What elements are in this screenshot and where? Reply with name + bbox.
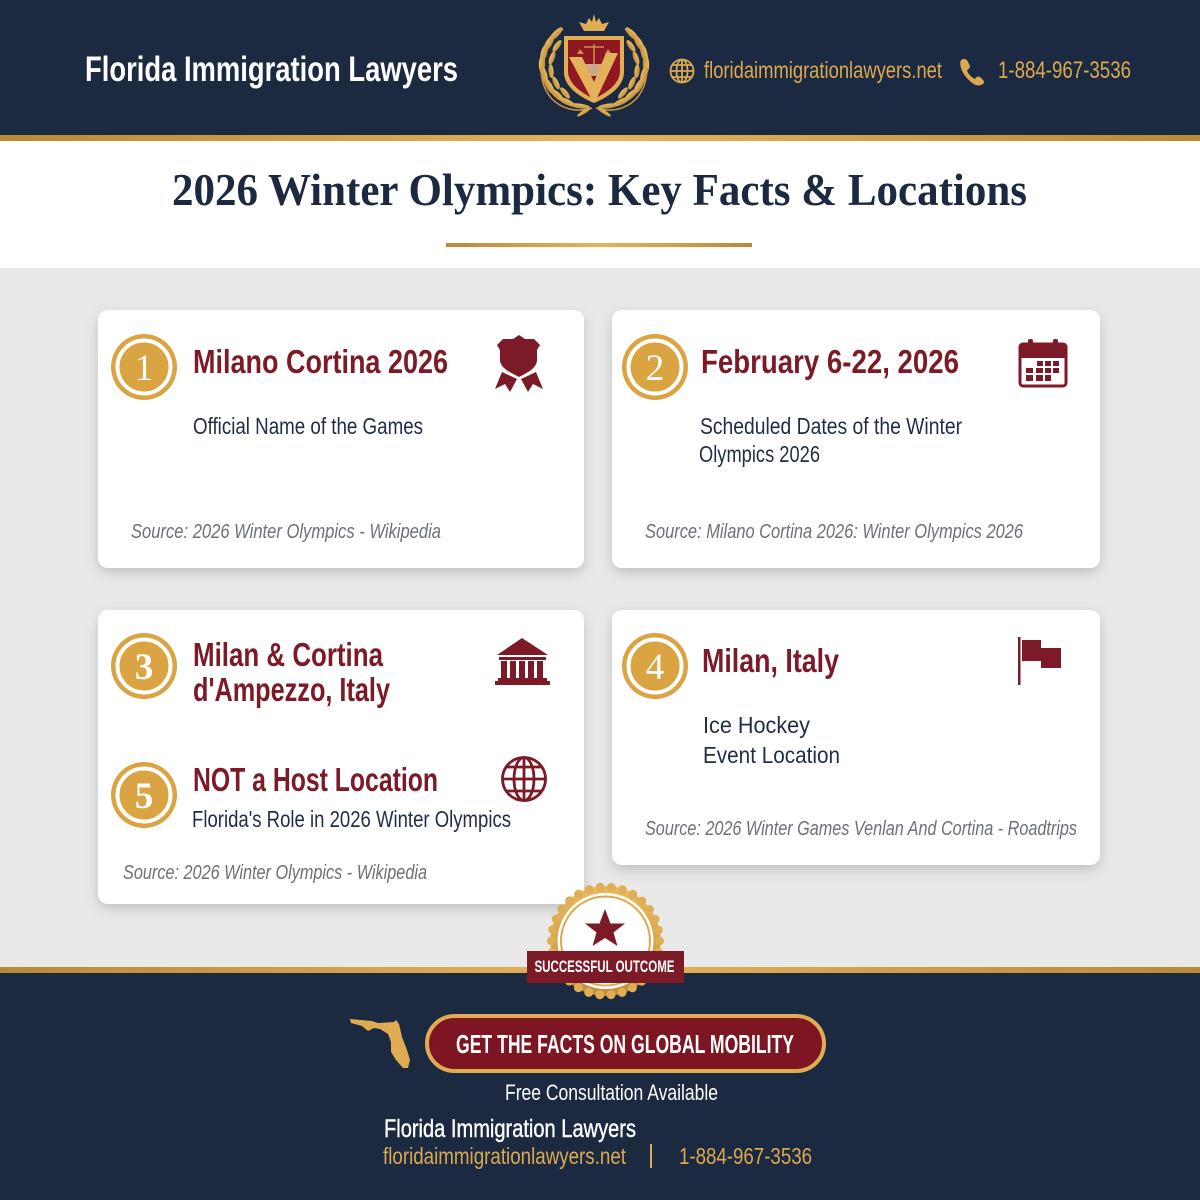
- number badge 1: [111, 334, 177, 400]
- seal banner text: SUCCESSFUL OUTCOME: [534, 957, 674, 976]
- icon: website globe: [670, 60, 694, 82]
- footer website: floridaimmigrationlawyers.net: [383, 1143, 626, 1169]
- footer firm name: Florida Immigration Lawyers: [384, 1115, 636, 1143]
- heading 3: Milan & Cortina: [193, 636, 383, 673]
- seal banner: [527, 951, 684, 983]
- website: floridaimmigrationlawyers.net: [704, 57, 942, 83]
- footer divider: [650, 1144, 652, 1168]
- title: 2026 Winter Olympics: Key Facts & Locations: [172, 164, 1027, 215]
- description 1: Official Name of the Games: [193, 413, 423, 439]
- phone number: 1-884-967-3536: [998, 57, 1131, 84]
- number badge 3: [111, 633, 177, 699]
- number badge 5: 5: [135, 776, 153, 817]
- footer phone: 1-884-967-3536: [679, 1143, 812, 1169]
- number badge 3: 3: [135, 647, 153, 688]
- logo crown: [579, 14, 609, 31]
- panel: card 4 event location: [612, 610, 1100, 865]
- heading 3: d'Ampezzo, Italy: [193, 671, 390, 708]
- number badge 2: [622, 334, 688, 400]
- icon: calendar: [1019, 339, 1067, 386]
- logo shield: [564, 36, 624, 103]
- description 2: Olympics 2026: [699, 441, 820, 467]
- description 4: Ice Hockey: [703, 712, 810, 738]
- number badge 2: 2: [646, 348, 664, 389]
- free consultation note: Free Consultation Available: [505, 1080, 718, 1105]
- source 1: Source: 2026 Winter Olympics - Wikipedia: [131, 521, 441, 543]
- heading 2: February 6-22, 2026: [701, 343, 959, 380]
- source 4: Source: 2026 Winter Games Venlan And Cortina - Roadtrips: [645, 818, 1077, 840]
- panel: card 3 and 5 locations: [98, 610, 584, 904]
- icon: ribbon shield: [495, 335, 543, 392]
- source 5: Source: 2026 Winter Olympics - Wikipedia: [123, 862, 427, 884]
- footer band: [0, 967, 1200, 1200]
- header band: [0, 0, 1200, 141]
- logo: crest with wreath and crown: [538, 14, 650, 118]
- number badge 5: [111, 762, 177, 828]
- heading 1: Milano Cortina 2026: [193, 343, 448, 380]
- heading 5: NOT a Host Location: [193, 761, 438, 798]
- header firm name: Florida Immigration Lawyers: [85, 50, 458, 89]
- panel: card 1 official name: [98, 310, 584, 568]
- description 5: Florida's Role in 2026 Winter Olympics: [192, 806, 511, 832]
- title underline: [446, 243, 752, 247]
- icon: phone: [960, 59, 984, 86]
- description 2: Scheduled Dates of the Winter: [700, 413, 962, 439]
- number badge 1: 1: [135, 348, 153, 389]
- panel: card 2 dates: [612, 310, 1100, 568]
- source 2: Source: Milano Cortina 2026: Winter Olympics 2026: [645, 521, 1024, 543]
- icon: institution building: [495, 638, 550, 685]
- icon: florida map: [350, 1019, 410, 1068]
- call to action button: GET THE FACTS ON GLOBAL MOBILITY: [456, 1029, 794, 1059]
- seal: successful outcome: [527, 886, 684, 996]
- call to action button: [427, 1016, 824, 1071]
- heading 4: Milan, Italy: [702, 642, 840, 679]
- icon: globe: [502, 758, 546, 800]
- number badge 4: [622, 633, 688, 699]
- icon: flag: [1018, 637, 1061, 685]
- description 4: Event Location: [703, 742, 840, 768]
- number badge 4: 4: [646, 647, 664, 688]
- title band: [0, 141, 1200, 268]
- seal star: [585, 909, 625, 946]
